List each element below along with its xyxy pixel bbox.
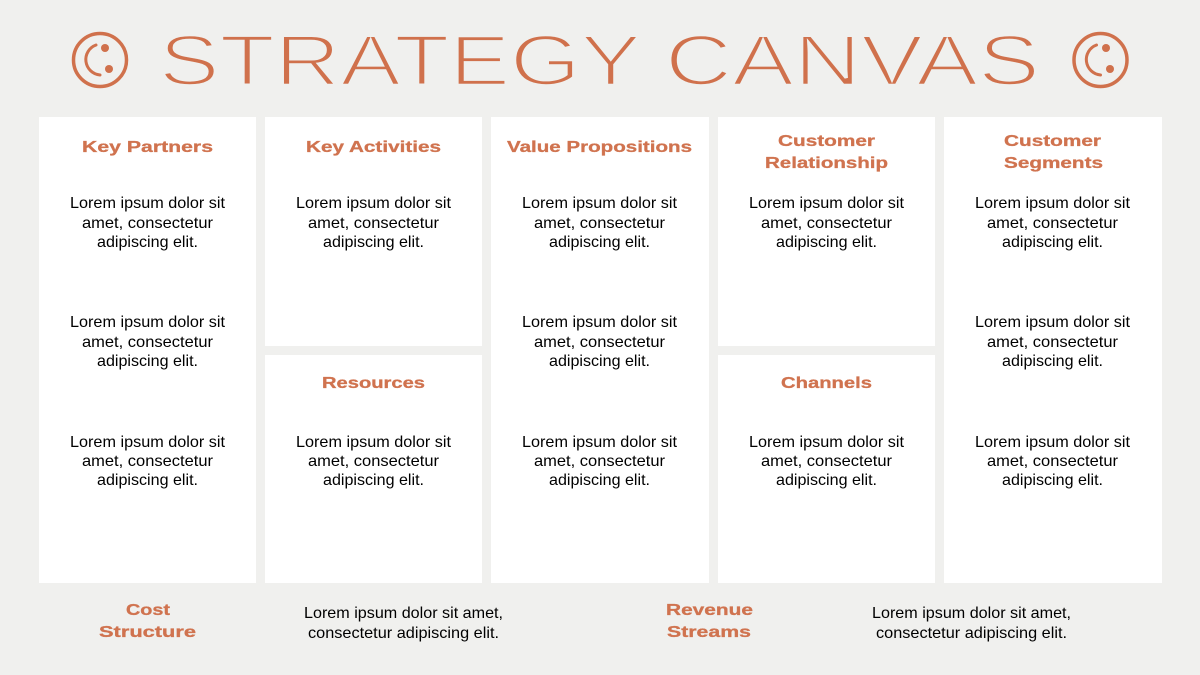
title: CANVAS (665, 22, 1040, 101)
text block: adipiscing elit. (323, 472, 424, 489)
text block: Lorem ipsum dolor sit (296, 195, 452, 212)
text block: adipiscing elit. (323, 234, 424, 251)
text block: revenue streams: consectetur adipiscing elit. (876, 625, 1067, 642)
panel: key activities (265, 117, 482, 346)
text block 2: amet, consectetur (534, 334, 666, 351)
panel: value propositions (491, 117, 709, 583)
text block 3: amet, consectetur (534, 453, 666, 470)
text block: Lorem ipsum dolor sit (749, 434, 905, 451)
text block: adipiscing elit. (776, 234, 877, 251)
text block 1: Lorem ipsum dolor sit (70, 195, 226, 212)
icon: left smiley (74, 34, 126, 86)
title (159, 22, 1040, 101)
text block 1 (975, 195, 1131, 251)
heading: revenue streams (666, 602, 753, 641)
text block 2: adipiscing elit. (97, 353, 198, 370)
heading: customer relationship: Customer (778, 133, 875, 150)
text block 2: amet, consectetur (987, 334, 1119, 351)
text block: amet, consectetur (761, 215, 893, 232)
text block: Lorem ipsum dolor sit (296, 434, 452, 451)
text block 2 (70, 314, 226, 370)
text block 2: adipiscing elit. (549, 353, 650, 370)
text block 2 (975, 314, 1131, 370)
title: STRATEGY (159, 22, 641, 101)
text block 2: Lorem ipsum dolor sit (70, 314, 226, 331)
heading: key partners: Key Partners (82, 139, 213, 156)
text block 3: amet, consectetur (82, 453, 214, 470)
text block 3: adipiscing elit. (97, 472, 198, 489)
text block 1: amet, consectetur (987, 215, 1119, 232)
heading: customer relationship: Relationship (765, 155, 888, 172)
text block 1: adipiscing elit. (97, 234, 198, 251)
heading: revenue streams: Revenue (666, 602, 753, 619)
text block 1: adipiscing elit. (1002, 234, 1103, 251)
panel: channels (718, 355, 935, 583)
text block 2: amet, consectetur (82, 334, 214, 351)
text block: amet, consectetur (761, 453, 893, 470)
text block (749, 434, 905, 489)
heading: cost structure: Structure (99, 624, 196, 641)
text block 1: Lorem ipsum dolor sit (975, 195, 1131, 212)
heading: revenue streams: Streams (667, 624, 751, 641)
heading: customer relationship (765, 133, 888, 172)
text block 3 (70, 434, 226, 489)
text block 1: amet, consectetur (82, 215, 214, 232)
text block 1: adipiscing elit. (549, 234, 650, 251)
heading: customer segments: Customer (1004, 133, 1101, 150)
panel: resources (265, 355, 482, 583)
text block 2: adipiscing elit. (1002, 353, 1103, 370)
text block 1: Lorem ipsum dolor sit (522, 195, 678, 212)
text block 3 (975, 434, 1131, 489)
text block (296, 434, 452, 489)
icon: right smiley (1074, 34, 1127, 86)
heading: customer segments (1004, 133, 1103, 172)
text block 2: Lorem ipsum dolor sit (975, 314, 1131, 331)
text block (296, 195, 452, 251)
text block: amet, consectetur (308, 215, 440, 232)
text block: amet, consectetur (308, 453, 440, 470)
text block 2: Lorem ipsum dolor sit (522, 314, 678, 331)
text block 1 (70, 195, 226, 251)
text block 3: adipiscing elit. (549, 472, 650, 489)
text block: cost structure: Lorem ipsum dolor sit amet, (304, 605, 503, 622)
heading: customer segments: Segments (1004, 155, 1103, 172)
text block: adipiscing elit. (776, 472, 877, 489)
text block 1: amet, consectetur (534, 215, 666, 232)
text block 3: Lorem ipsum dolor sit (975, 434, 1131, 451)
panel: customer relationship (718, 117, 935, 346)
text block: Lorem ipsum dolor sit (749, 195, 905, 212)
text block 3: Lorem ipsum dolor sit (70, 434, 226, 451)
heading: value propositions: Value Propositions (507, 139, 692, 156)
text block 1 (522, 195, 678, 251)
heading: resources: Resources (322, 375, 425, 392)
heading: cost structure: Cost (126, 602, 171, 619)
heading: cost structure (99, 602, 196, 641)
text block (749, 195, 905, 251)
panel: customer segments (944, 117, 1162, 583)
text block 3: Lorem ipsum dolor sit (522, 434, 678, 451)
text block: cost structure (304, 605, 503, 642)
text block 2 (522, 314, 678, 370)
text block: cost structure: consectetur adipiscing elit. (308, 625, 499, 642)
text block: revenue streams: Lorem ipsum dolor sit amet, (872, 605, 1071, 622)
text block: revenue streams (872, 605, 1071, 642)
heading: key activities: Key Activities (306, 139, 441, 156)
text block 3: amet, consectetur (987, 453, 1119, 470)
heading: channels: Channels (781, 375, 872, 392)
text block 3: adipiscing elit. (1002, 472, 1103, 489)
panel: key partners (39, 117, 256, 583)
text block 3 (522, 434, 678, 489)
